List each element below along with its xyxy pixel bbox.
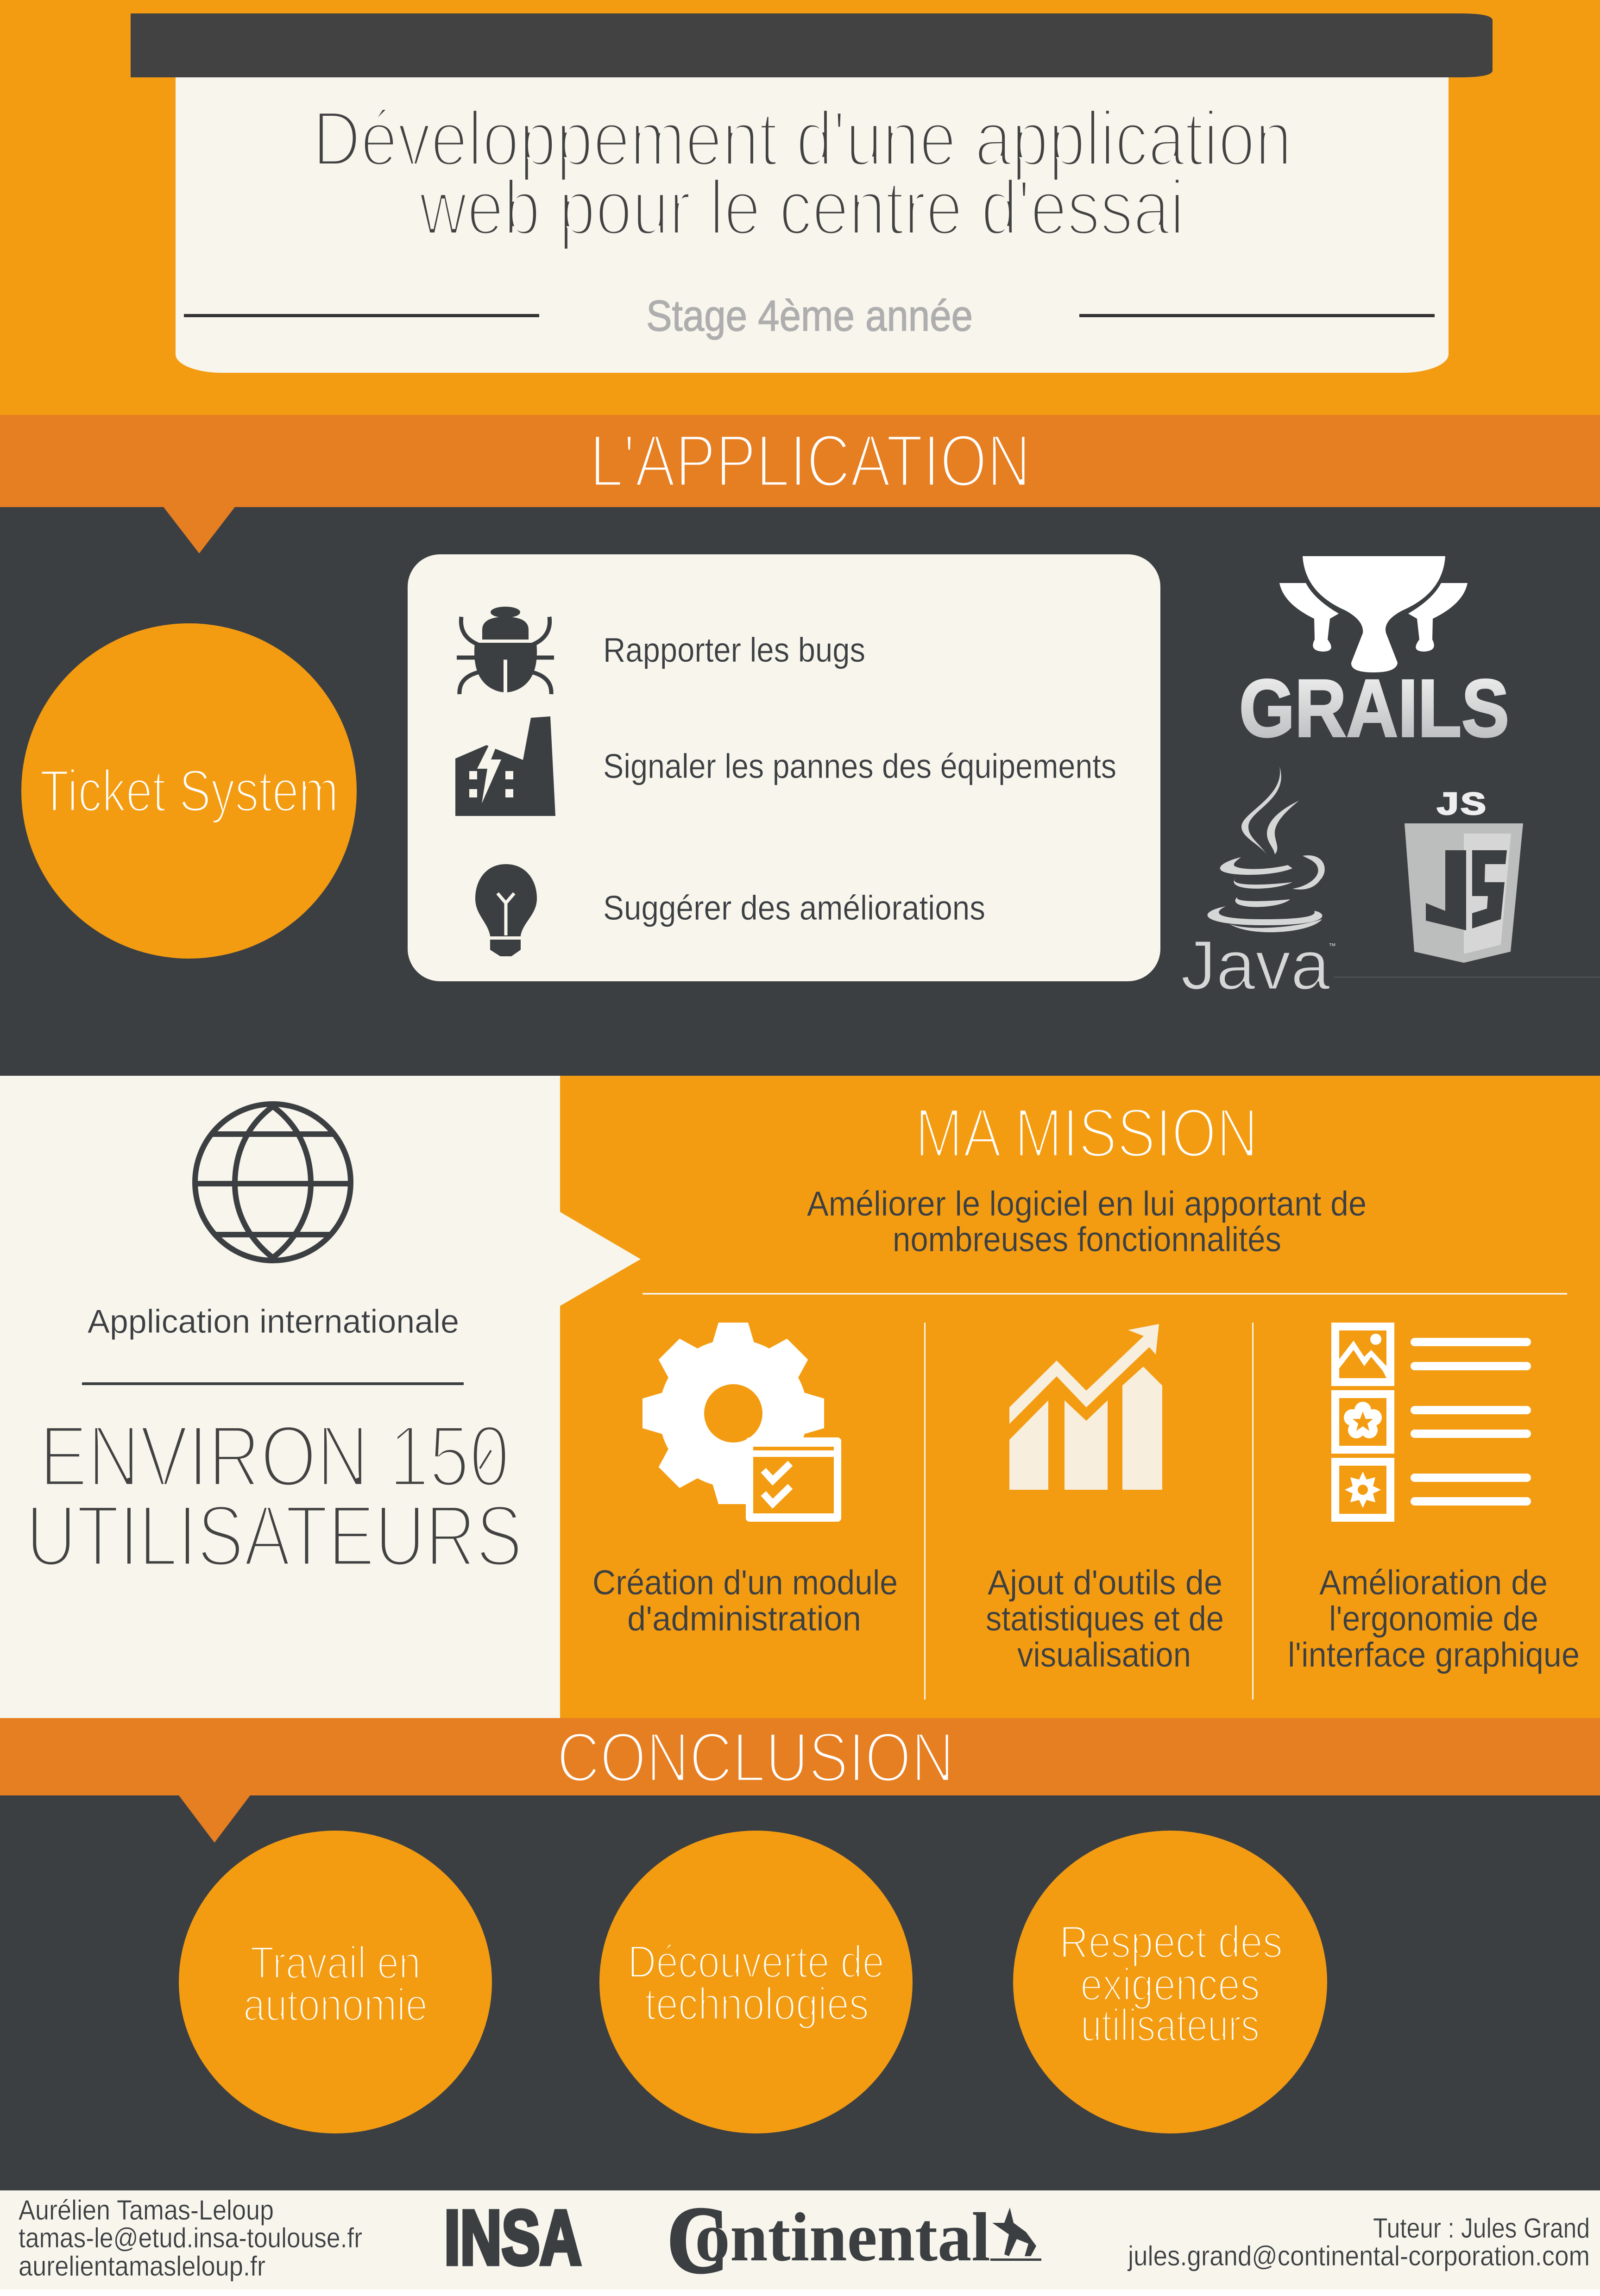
logo: JS	[1405, 788, 1523, 963]
text: international application: Application internationale	[88, 1304, 459, 1340]
panel: ticket features	[408, 554, 1160, 981]
text: admin module	[592, 1563, 898, 1638]
circle: autonomy: Travail en	[250, 1937, 421, 1988]
icon: image list	[1331, 1323, 1531, 1522]
text: statistics tools: statistiques et de	[986, 1599, 1224, 1638]
logo: INSA: INSA	[444, 2195, 581, 2281]
student contact: Aurélien Tamas-Leloup	[19, 2195, 274, 2226]
circle: user requirements: Respect des	[1059, 1916, 1283, 1967]
text: improvements: Suggérer des améliorations	[603, 889, 985, 927]
subtitle	[184, 291, 1435, 340]
section: conclusion background	[0, 1795, 1600, 2190]
circle: technologies	[599, 1831, 913, 2133]
panel: mission	[560, 1076, 1600, 1718]
logo: Java: ™	[1329, 942, 1336, 950]
icon: globe	[195, 1104, 351, 1261]
arrow	[560, 1212, 641, 1306]
text: mission description: nombreuses fonctionnalités	[893, 1220, 1281, 1259]
text: admin module: Création d'un module	[592, 1563, 898, 1602]
text: equipment failures: Signaler les pannes des équipements	[603, 747, 1116, 785]
heading: mission: MA MISSION	[915, 1094, 1258, 1172]
text: interface ergonomics: l'interface graphique	[1288, 1635, 1580, 1674]
card body	[176, 74, 1449, 373]
subtitle: Stage 4ème année	[646, 291, 973, 340]
tutor contact	[1127, 2213, 1590, 2271]
circle: Ticket System: Ticket System	[40, 758, 339, 824]
footer	[0, 2188, 1600, 2293]
student contact	[19, 2195, 362, 2282]
page background: header	[0, 0, 1600, 415]
text: mission description: Améliorer le logiciel en lui apportant de	[807, 1184, 1367, 1223]
text: interface ergonomics	[1288, 1563, 1580, 1674]
logo: JS: JS	[1435, 788, 1486, 825]
circle: autonomy	[179, 1831, 492, 2133]
title card	[131, 13, 1493, 373]
icon: rising chart	[1009, 1324, 1162, 1490]
logo: Continental: o	[695, 2199, 730, 2276]
circle: user requirements: utilisateurs	[1081, 2000, 1260, 2051]
panel: users	[0, 1076, 560, 1718]
logo: Continental: C	[667, 2188, 728, 2293]
circle: technologies: technologies	[645, 1978, 869, 2029]
icon: factory	[455, 716, 555, 816]
text: statistics tools: visualisation	[1017, 1635, 1191, 1674]
logo: Continental: ntinental	[730, 2199, 990, 2276]
text: bugs: Rapporter les bugs	[603, 631, 865, 669]
text: admin module: d'administration	[627, 1599, 861, 1638]
dark ribbon	[131, 13, 1493, 77]
stat: users count	[26, 1407, 523, 1584]
student contact: tamas-le@etud.insa-toulouse.fr	[19, 2222, 362, 2253]
icon: light bulb	[475, 864, 537, 956]
circle: autonomy: autonomie	[243, 1979, 428, 2030]
logo: Java: Java	[1181, 926, 1330, 1004]
heading band: L'APPLICATION	[0, 415, 1600, 553]
student contact: aurelientamasleloup.fr	[19, 2251, 265, 2282]
stat: users count: UTILISATEURS	[26, 1487, 523, 1584]
logo: Continental	[667, 2188, 1041, 2293]
text: statistics tools	[986, 1563, 1224, 1674]
logo: Java	[1181, 766, 1336, 1004]
title: web pour le centre d'essai	[419, 164, 1184, 251]
text: statistics tools: Ajout d'outils de	[988, 1563, 1222, 1602]
circle: technologies: Découverte de	[628, 1936, 884, 1987]
circle: user requirements: exigences	[1080, 1959, 1260, 2010]
text: mission description	[807, 1184, 1367, 1259]
icon: gear with checklist	[643, 1323, 841, 1522]
heading band: CONCLUSION	[0, 1718, 1600, 1843]
icon: bug	[457, 607, 554, 694]
section: application background	[0, 507, 1600, 1076]
text: interface ergonomics: Amélioration de	[1319, 1563, 1548, 1602]
heading band: L'APPLICATION: L'APPLICATION	[590, 419, 1031, 502]
circle: Ticket System	[21, 623, 357, 959]
heading band: CONCLUSION: CONCLUSION	[557, 1718, 954, 1797]
text: interface ergonomics: l'ergonomie de	[1329, 1599, 1538, 1638]
circle: user requirements	[1013, 1831, 1327, 2133]
title: Développement d'une application	[313, 95, 1292, 182]
logo: Grails: GRAILS	[1239, 663, 1509, 754]
logo: Grails	[1239, 556, 1509, 754]
title	[313, 95, 1292, 251]
stat: users count: ENVIRON 150	[39, 1407, 510, 1505]
